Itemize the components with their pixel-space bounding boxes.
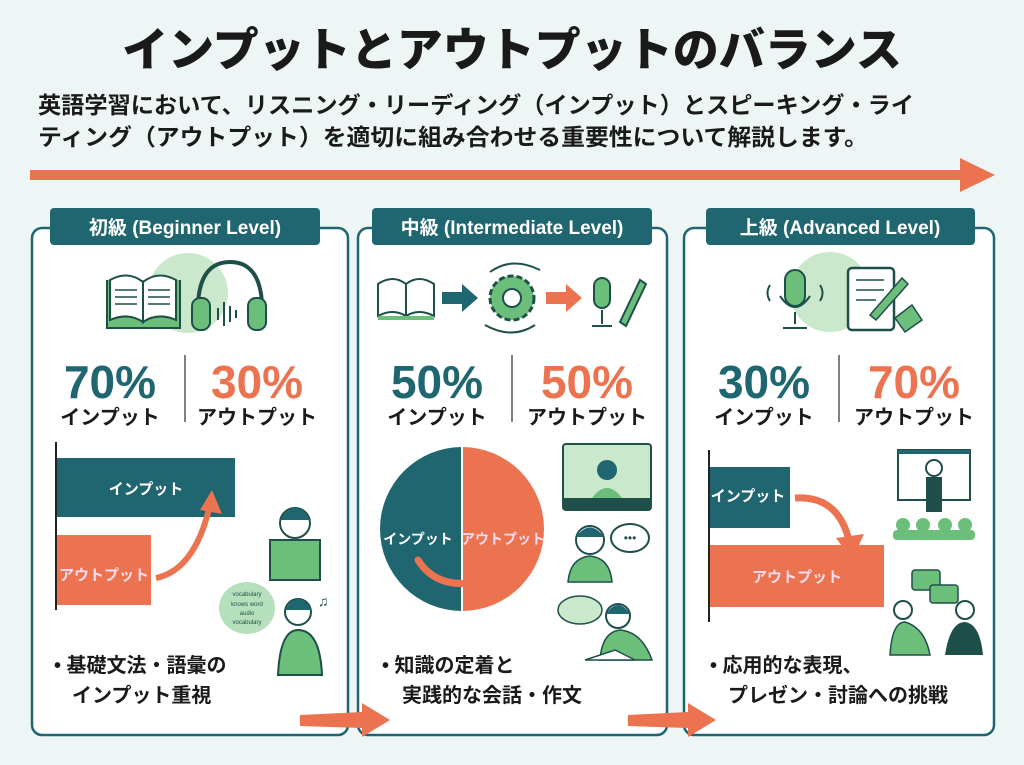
- stat: 50% output: アウトプット: [527, 406, 647, 429]
- text: beginner bullet: インプット重視: [72, 684, 211, 707]
- heading: intermediate: 中級 (Intermediate Level): [401, 217, 623, 239]
- stat: 70% output: アウトプット: [854, 406, 974, 429]
- subtitle: [38, 86, 914, 152]
- illustration: video call: [563, 444, 651, 510]
- stat: 50% output: 50%: [541, 356, 633, 408]
- title: インプットとアウトプットのバランス: [122, 14, 902, 80]
- pie chart: アウトプット: [461, 531, 545, 547]
- stat: 70% input: 70%: [64, 356, 156, 408]
- bar chart: advanced: インプット: [711, 488, 785, 505]
- stat: 30% output: アウトプット: [197, 406, 317, 429]
- bar chart: beginner: インプット: [109, 481, 183, 498]
- text: beginner bullet: • 基礎文法・語彙の: [54, 654, 227, 677]
- bar chart: beginner: アウトプット: [59, 567, 149, 584]
- illustration: listening person: vocabulary: [232, 592, 262, 598]
- illustration: discussion: [890, 570, 983, 655]
- text: advanced bullet: プレゼン・討論への挑戦: [728, 683, 948, 707]
- stat: 70% input: インプット: [60, 406, 160, 429]
- panel: intermediate: [358, 208, 667, 735]
- text: advanced bullet: [710, 654, 948, 707]
- text: intermediate bullet: [382, 654, 582, 707]
- icon: book-gear-mic flow: [378, 263, 646, 332]
- stat: 70% output: 70%: [868, 356, 960, 408]
- illustration: listening person: ♫: [318, 593, 328, 609]
- arrow: beginner to intermediate: [300, 703, 390, 737]
- heading: advanced: [706, 208, 975, 245]
- heading: beginner: [50, 208, 320, 245]
- stat: 30% output: [197, 356, 317, 429]
- subtitle: 英語学習において、リスニング・リーディング（インプット）とスピーキング・ライ: [38, 86, 914, 120]
- illustration: listening person: knows word: [231, 602, 263, 608]
- stat: 50% input: [387, 356, 487, 429]
- icon: mic and tablet: [768, 252, 922, 332]
- bar chart: beginner: [56, 442, 235, 610]
- stat: 30% input: [714, 356, 814, 429]
- heading: advanced: 上級 (Advanced Level): [740, 217, 940, 239]
- stat: 50% input: インプット: [387, 406, 487, 429]
- panel: advanced: [684, 208, 994, 735]
- stat: 50% input: 50%: [391, 356, 483, 408]
- stat: 50% output: [527, 356, 647, 429]
- icon: book and headphones: [107, 253, 266, 333]
- arrow: progression: [30, 158, 995, 192]
- illustration: writing person: [558, 596, 652, 660]
- arrow: intermediate to advanced: [628, 703, 716, 737]
- pie chart: インプット: [383, 531, 453, 547]
- illustration: listening person: [219, 582, 328, 675]
- illustration: presenter: [893, 450, 975, 540]
- bar chart: advanced: アウトプット: [752, 569, 842, 586]
- bar chart: advanced: [709, 450, 884, 622]
- illustration: speaking person: •••: [624, 531, 636, 545]
- subtitle: ティング（アウトプット）を適切に組み合わせる重要性について解説します。: [38, 118, 868, 152]
- text: advanced bullet: • 応用的な表現、: [710, 654, 863, 677]
- text: beginner bullet: [54, 654, 227, 707]
- text: intermediate bullet: 実践的な会話・作文: [402, 684, 582, 707]
- illustration: listening person: vocabulary: [232, 620, 262, 626]
- illustration: reading person: [270, 508, 320, 580]
- stat: 70% input: [60, 356, 160, 429]
- stat: 70% output: [854, 356, 974, 429]
- heading: intermediate: [372, 208, 652, 245]
- stat: 30% input: インプット: [714, 406, 814, 429]
- illustration: speaking person: [568, 524, 649, 582]
- pie chart: [380, 447, 545, 611]
- heading: beginner: 初級 (Beginner Level): [89, 217, 281, 239]
- illustration: listening person: audio: [240, 611, 255, 617]
- stat: 30% output: 30%: [211, 356, 303, 408]
- stat: 30% input: 30%: [718, 356, 810, 408]
- panel: beginner: [32, 208, 348, 735]
- text: intermediate bullet: • 知識の定着と: [382, 654, 515, 677]
